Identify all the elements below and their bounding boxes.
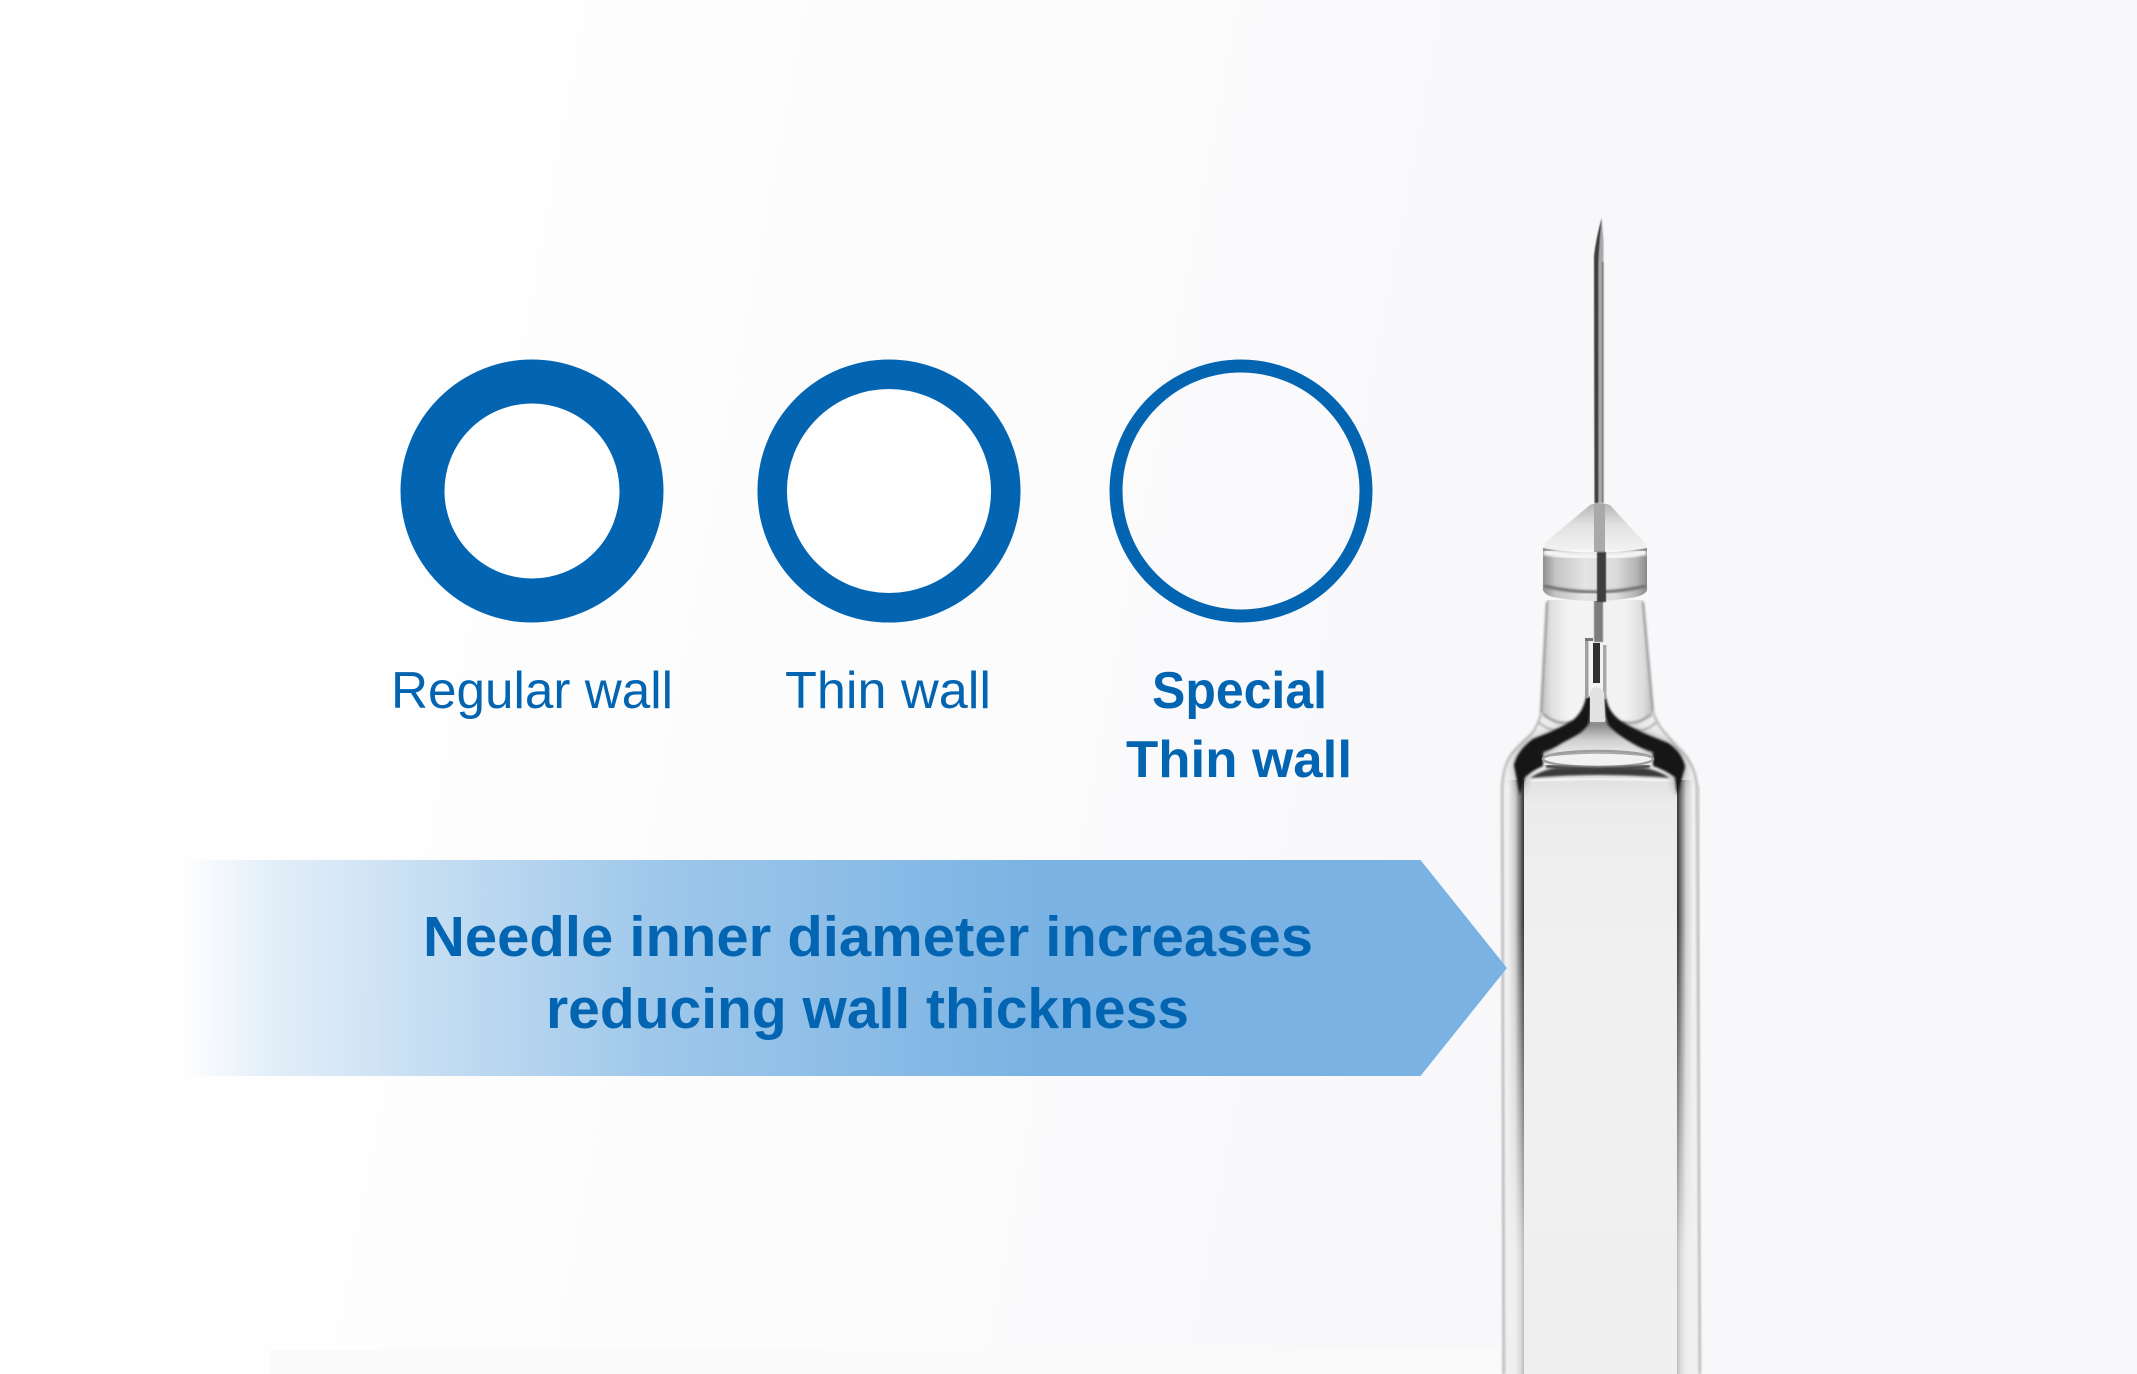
arrow text: Needle inner diameter increases (423, 905, 1313, 969)
syringe cannula (1585, 600, 1606, 722)
syringe needle (1594, 218, 1604, 503)
label: special thin wall (1126, 662, 1352, 789)
syringe barrel glass (1502, 600, 1700, 1374)
label: special thin wall: Thin wall (1126, 731, 1352, 789)
label: thin wall: Thin wall (785, 662, 991, 720)
syringe hub (1543, 503, 1647, 602)
syringe bore (1524, 777, 1677, 1374)
syringe (1502, 218, 1700, 1374)
syringe shoulder highlight (1543, 720, 1653, 768)
syringe stopper ring (1530, 751, 1670, 778)
syringe dark shoulder right (1604, 697, 1685, 795)
arrow text (423, 905, 1313, 1041)
arrow text: reducing wall thickness (546, 977, 1189, 1041)
ring: thin wall (772, 374, 1006, 608)
label: regular wall: Regular wall (391, 662, 673, 720)
ring: special thin wall (1116, 366, 1366, 616)
label: special thin wall: Special (1152, 662, 1327, 720)
arrow: needle inner diameter increases (181, 860, 1507, 1076)
syringe dark shoulder left (1514, 697, 1591, 795)
syringe shoulder soft shadow (1515, 724, 1685, 795)
ring: regular wall (422, 382, 642, 600)
